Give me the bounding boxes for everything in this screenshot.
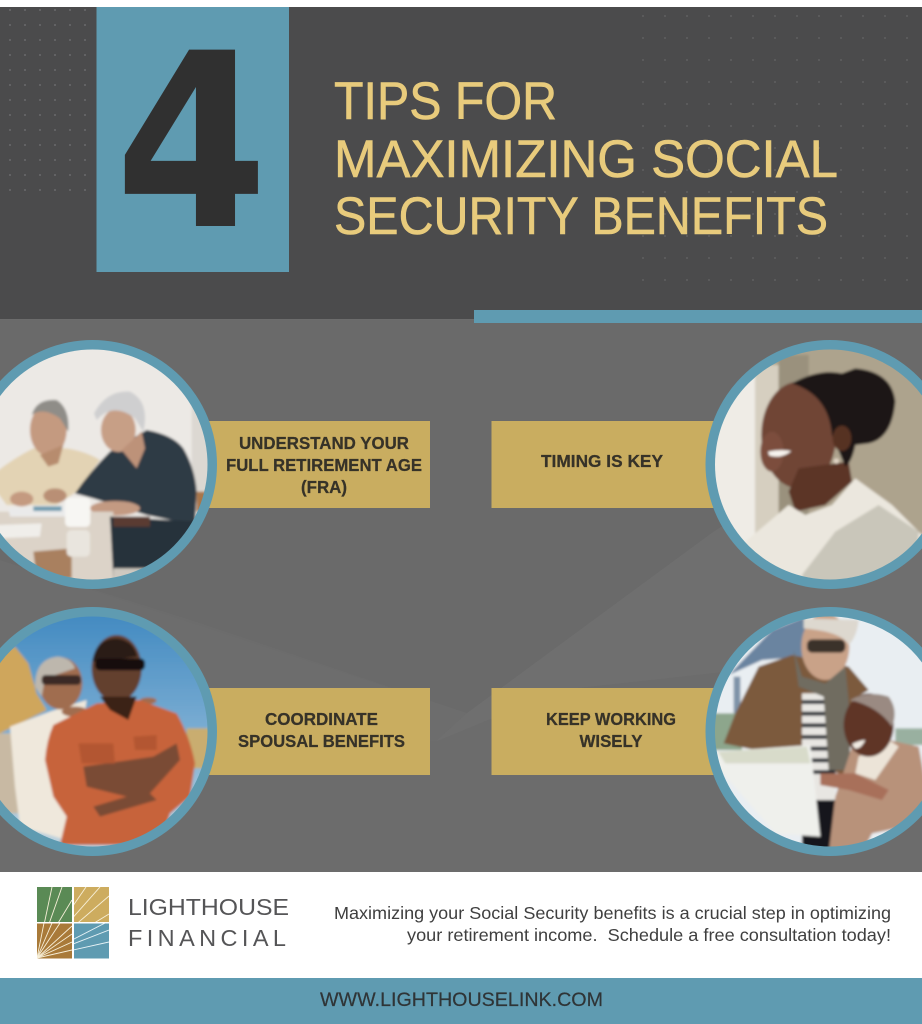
tip label: understand your FRA: (FRA) <box>301 477 347 497</box>
accent bar under header <box>474 310 922 323</box>
panel: gray tips background <box>0 319 922 872</box>
tip label: coordinate spousal benefits: COORDINATE <box>265 709 378 729</box>
title: TIPS FOR <box>334 72 557 131</box>
logo mark <box>37 887 109 958</box>
website address: WWW.LIGHTHOUSELINK.COM <box>320 990 603 1011</box>
logo wordmark: LIGHTHOUSE <box>128 894 289 920</box>
big number 4: 4 <box>115 2 268 284</box>
photo: older couple reviewing papers at a table <box>0 340 233 589</box>
title: SECURITY BENEFITS <box>334 187 828 246</box>
title <box>334 72 838 246</box>
panel: website bar <box>0 978 922 1024</box>
footer message: Maximizing your Social Security benefits is a crucial step in optimizing <box>334 903 891 923</box>
title: MAXIMIZING SOCIAL <box>334 130 838 189</box>
tip label: timing is key <box>492 421 714 508</box>
photo: older couple looking at a map <box>702 607 922 856</box>
logo wordmark: FINANCIAL <box>128 925 286 951</box>
footer message <box>334 903 891 945</box>
tip label: keep working wisely: WISELY <box>580 731 643 751</box>
tip label: coordinate spousal benefits: SPOUSAL BENEFITS <box>238 731 405 751</box>
tip label: understand your FRA <box>209 421 430 508</box>
photo: smiling woman looking to the side <box>702 340 922 589</box>
panel: footer white band <box>0 872 922 978</box>
tip label: understand your FRA: FULL RETIREMENT AGE <box>226 455 422 475</box>
page background: white top strip <box>0 0 922 7</box>
logo wordmark <box>128 894 289 951</box>
tip label: keep working wisely: KEEP WORKING <box>546 709 676 729</box>
footer message: your retirement income. Schedule a free consultation today! <box>407 925 891 945</box>
tip label: understand your FRA: UNDERSTAND YOUR <box>239 433 409 453</box>
panel: big number block <box>96 2 289 284</box>
tip label: coordinate spousal benefits <box>209 688 430 775</box>
tip label: keep working wisely <box>492 688 714 775</box>
tip label: timing is key: TIMING IS KEY <box>541 451 663 471</box>
panel: header band <box>0 3 922 319</box>
photo: smiling couple in sunglasses at the beach <box>0 607 233 856</box>
